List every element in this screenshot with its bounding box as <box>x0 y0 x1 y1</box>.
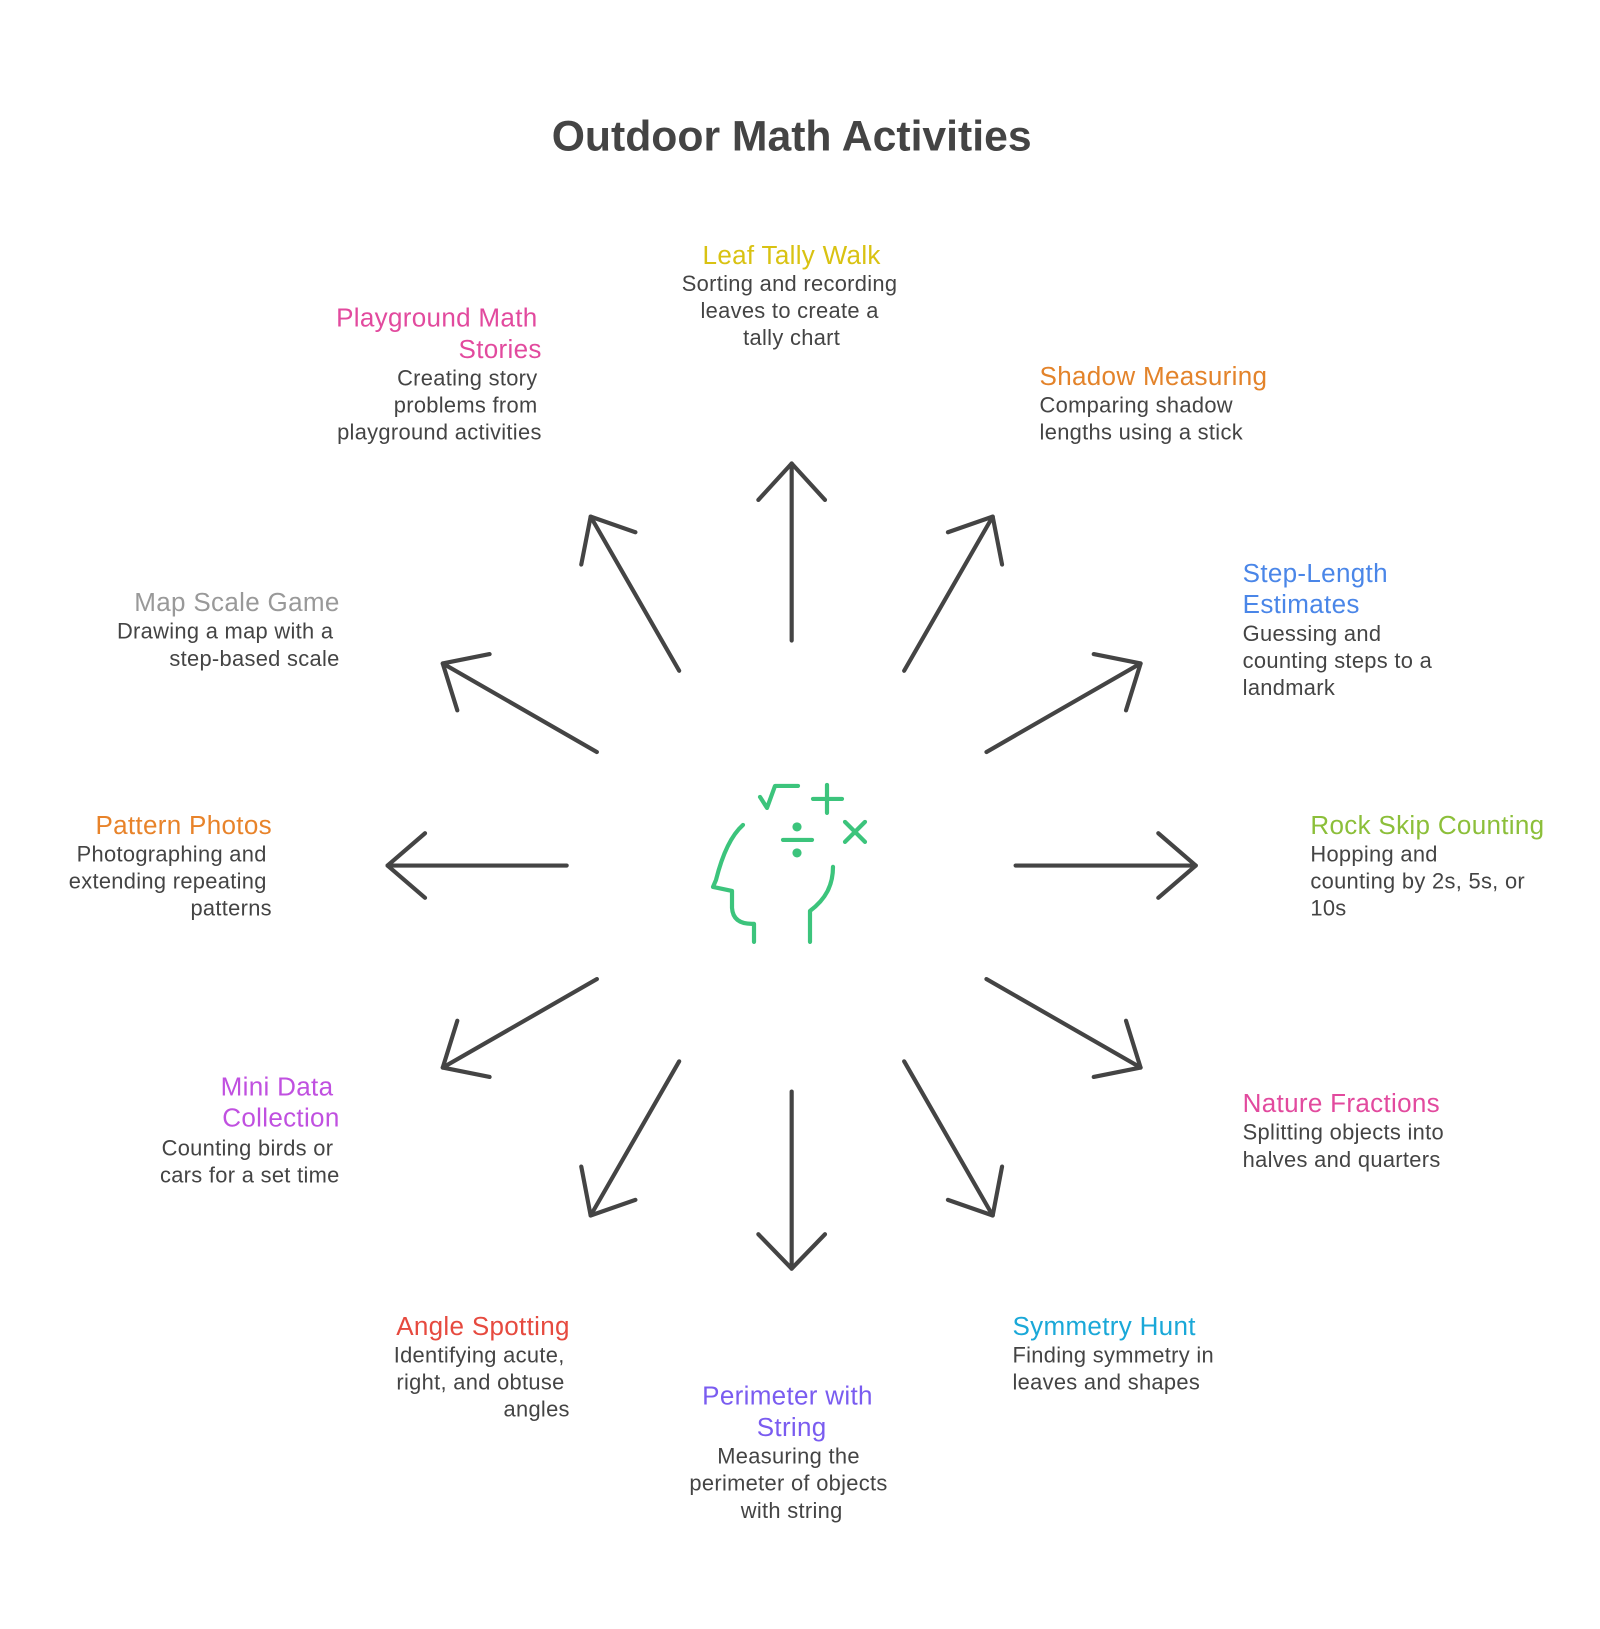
label: Angle Spotting: angles <box>504 1397 570 1422</box>
arrow: down-left steep <box>581 1061 679 1216</box>
icon: head with math symbols <box>713 785 865 942</box>
arrow: down-right shallow <box>986 979 1141 1077</box>
arrow: up <box>758 463 825 641</box>
label: Nature Fractions <box>1243 1088 1444 1172</box>
label: Symmetry Hunt: Finding symmetry in <box>1012 1343 1214 1368</box>
label: Nature Fractions: Nature Fractions <box>1243 1088 1440 1118</box>
label: Rock Skip Counting: counting by 2s, 5s, or <box>1310 869 1525 894</box>
label: Leaf Tally Walk: Leaf Tally Walk <box>703 240 881 270</box>
label: Leaf Tally Walk <box>682 240 897 350</box>
arrow: right <box>1016 833 1196 898</box>
label: Nature Fractions: halves and quarters <box>1243 1147 1441 1172</box>
label: Map Scale Game: Map Scale Game <box>134 587 340 617</box>
label: Nature Fractions: Splitting objects into <box>1243 1120 1444 1145</box>
arrow: down-left shallow <box>443 979 597 1077</box>
label: Pattern Photos <box>69 810 272 921</box>
arrows <box>388 463 1196 1269</box>
label: Step-Length Estimates: Step-Length <box>1243 558 1388 588</box>
label: Mini Data Collection: Mini Data <box>221 1071 334 1101</box>
label: Symmetry Hunt <box>1012 1311 1214 1395</box>
label: Step-Length Estimates: landmark <box>1243 675 1335 700</box>
arrow: up-right shallow <box>986 654 1141 752</box>
label: Step-Length Estimates: Estimates <box>1243 589 1360 619</box>
label: Playground Math Stories <box>336 303 542 445</box>
label: Shadow Measuring: Shadow Measuring <box>1040 361 1267 391</box>
label: Perimeter with String: perimeter of objects <box>689 1471 888 1496</box>
label: Step-Length Estimates <box>1243 558 1433 700</box>
label: Pattern Photos: patterns <box>190 896 272 921</box>
label: Mini Data Collection: cars for a set time <box>160 1162 340 1187</box>
label: Perimeter with String: String <box>757 1412 827 1442</box>
title: Outdoor Math Activities <box>552 112 1032 160</box>
label: Shadow Measuring: lengths using a stick <box>1040 420 1243 445</box>
label: Symmetry Hunt: leaves and shapes <box>1012 1370 1200 1395</box>
label: Rock Skip Counting: Hopping and <box>1310 842 1438 867</box>
label: Playground Math Stories: problems from <box>394 393 538 418</box>
label: Mini Data Collection: Counting birds or <box>162 1135 333 1160</box>
label: Perimeter with String: Measuring the <box>717 1444 860 1469</box>
label: Rock Skip Counting: 10s <box>1310 896 1347 921</box>
label: Angle Spotting: Identifying acute, <box>394 1343 565 1368</box>
label: Map Scale Game <box>117 587 340 671</box>
label: Angle Spotting: right, and obtuse <box>396 1370 565 1395</box>
label: Pattern Photos: Photographing and <box>77 842 267 867</box>
label: Shadow Measuring: Comparing shadow <box>1040 393 1233 418</box>
arrow: up-right steep <box>904 517 1002 671</box>
arrow: up-left shallow <box>443 654 597 752</box>
label: Playground Math Stories: Creating story <box>397 366 538 391</box>
label: Step-Length Estimates: Guessing and <box>1243 621 1381 646</box>
label: Mini Data Collection: Collection <box>222 1103 340 1133</box>
label: Angle Spotting <box>394 1311 570 1422</box>
arrow: down <box>758 1092 825 1269</box>
label: Step-Length Estimates: counting steps to a <box>1243 648 1433 673</box>
label: Leaf Tally Walk: tally chart <box>743 325 840 350</box>
label: Playground Math Stories: playground activities <box>337 420 542 445</box>
label: Rock Skip Counting <box>1310 810 1544 921</box>
label: Rock Skip Counting: Rock Skip Counting <box>1310 810 1544 840</box>
arrow: left <box>388 833 567 898</box>
label: Symmetry Hunt: Symmetry Hunt <box>1012 1311 1196 1341</box>
label: Playground Math Stories: Stories <box>459 334 542 364</box>
label: Leaf Tally Walk: Sorting and recording <box>682 271 897 296</box>
label: Map Scale Game: step-based scale <box>169 646 340 671</box>
label: Shadow Measuring <box>1040 361 1267 445</box>
label: Mini Data Collection <box>160 1071 340 1187</box>
label: Perimeter with String: Perimeter with <box>702 1381 873 1411</box>
label: Playground Math Stories: Playground Math <box>336 303 538 333</box>
arrow: up-left steep <box>581 517 679 671</box>
label: Map Scale Game: Drawing a map with a <box>117 619 334 644</box>
arrow: down-right steep <box>904 1061 1002 1216</box>
label: Angle Spotting: Angle Spotting <box>396 1311 570 1341</box>
label: Pattern Photos: extending repeating <box>69 869 267 894</box>
label: Perimeter with String <box>689 1381 888 1523</box>
label: Perimeter with String: with string <box>740 1498 843 1523</box>
label: Pattern Photos: Pattern Photos <box>95 810 272 840</box>
label: Leaf Tally Walk: leaves to create a <box>700 298 879 323</box>
